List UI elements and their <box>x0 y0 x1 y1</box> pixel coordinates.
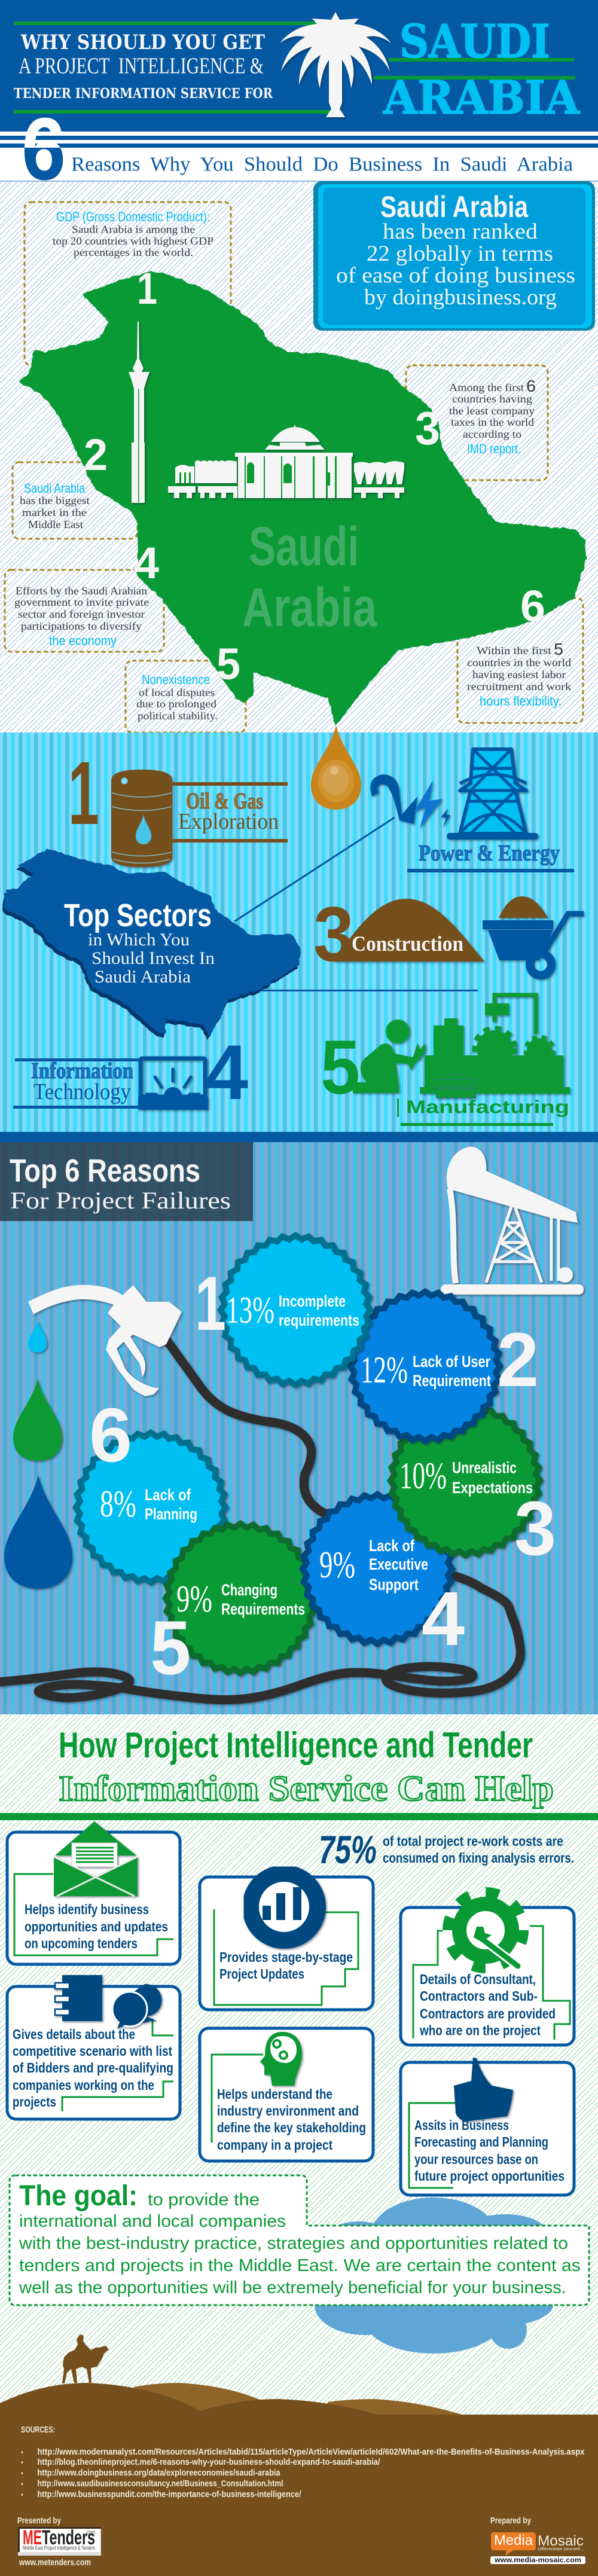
card: forecasting <box>401 2058 574 2195</box>
badge 2: lack of user requirement: Requirement <box>413 1372 491 1390</box>
text: sources: SOURCES: <box>21 2425 55 2435</box>
sector 4: information technology <box>13 1028 248 1116</box>
title: Saudi Arabia: ARABIA <box>383 71 580 125</box>
card: competitive scenario: projects <box>13 2094 56 2110</box>
card: consultant details: Contractors and Sub- <box>420 1988 538 2004</box>
badge 5: changing requirements: Requirements <box>221 1600 305 1618</box>
text: reason 3 taxes: IMD report. <box>467 441 521 456</box>
icon: oil drop <box>311 725 361 810</box>
card: consultant details: Details of Consultant, <box>420 1971 536 1987</box>
badge 4: lack of executive support: 9% <box>319 1543 355 1586</box>
number 4: 4 <box>422 1576 465 1662</box>
text: reason 5 stability <box>136 672 218 722</box>
icon: worker <box>353 1020 426 1093</box>
sector 3: construction: Construction <box>352 932 463 956</box>
text: reason 3 taxes: countries having <box>452 393 532 405</box>
text: reason 1 GDP: percentages in the world. <box>74 246 193 258</box>
panel: project failures <box>0 1142 598 1714</box>
number 2: 2 <box>497 1317 539 1403</box>
text: sources <box>21 2425 585 2499</box>
card: identify business opportunities: Helps identify business <box>25 1902 149 1917</box>
callout: box 5 outline <box>126 661 246 732</box>
logo: presented by ME Tenders: .com <box>86 2529 95 2536</box>
card: consultant details <box>401 1893 574 2045</box>
icon: oil barrel <box>111 770 172 867</box>
text: reason 2 market: Saudi Arabia <box>24 481 86 496</box>
icon: palace <box>168 425 404 498</box>
title: why should you get: TENDER INFORMATION SERVICE FOR <box>14 86 273 102</box>
callout: the goal: with the best-industry practice, strategies and opportunities related to <box>19 2234 568 2253</box>
panel: top sectors <box>0 725 598 1142</box>
logo: presented by ME Tenders: ME <box>23 2526 42 2549</box>
card: identify business opportunities: opportunities and updates <box>25 1919 168 1934</box>
badge 4: lack of executive support: Executive <box>369 1555 428 1573</box>
callout: ease of doing business ranking: Saudi Arabia <box>380 190 529 224</box>
number 6: 6 <box>89 1393 132 1478</box>
text: reason 2 market: Middle East <box>28 518 83 530</box>
badge 6: lack of planning: Lack of <box>145 1486 191 1504</box>
text: reason 4 economy <box>14 585 149 648</box>
map: top sectors: Top Sectors <box>64 898 212 933</box>
text: reason 3 taxes <box>449 377 536 456</box>
logo: presented by ME Tenders: Tenders <box>42 2526 95 2549</box>
sector 5: manufacturing <box>321 995 570 1126</box>
icon: fuel nozzle <box>28 1285 182 1396</box>
number 1: 1 <box>137 264 157 313</box>
text: sources: http://www.doingbusiness.org/data/exploreeconomies/saudi-arabia <box>37 2468 280 2478</box>
badge 5: changing requirements: Changing <box>221 1581 277 1599</box>
icon: cyan drop <box>29 1320 47 1353</box>
icon: green drop <box>13 1379 62 1461</box>
heading <box>59 1725 554 1808</box>
sector 2: power and energy: Power & Energy <box>419 841 560 866</box>
callout: box 4 outline <box>5 570 164 652</box>
map: top sectors <box>2 849 300 1040</box>
sector 3: construction <box>313 890 584 978</box>
text: sources: http://www.saudibusinessconsultancy.net/Business_Consultation.html <box>37 2479 283 2489</box>
text: reason 3 taxes: taxes in the world <box>451 416 534 428</box>
sector 1: oil and gas: 1 <box>68 743 99 843</box>
text: reason 1 GDP: GDP (Gross Domestic Product): <box>56 209 210 224</box>
title: why should you get: A PROJECT INTELLIGENCE & <box>19 54 264 79</box>
card: identify business opportunities: on upcoming tenders <box>25 1936 138 1951</box>
icon: monitor with sun <box>138 1058 208 1110</box>
sector 4: information technology: Information <box>31 1058 133 1083</box>
badge 1: incomplete requirements <box>217 1232 374 1388</box>
logo: presented by ME Tenders: Presented by <box>17 2516 61 2526</box>
text: reason 4 economy: participations to diversify <box>21 620 142 632</box>
callout: ease of doing business ranking <box>313 181 595 331</box>
icon: blue drop <box>4 1475 72 1589</box>
card: forecasting: Assits in Business <box>414 2117 509 2133</box>
heading: 6 reasons: Reasons Why You Should Do Business In Saudi Arabia <box>71 153 573 176</box>
text: reason 6 labor: having easiest labor <box>472 669 566 680</box>
icon: cloud <box>315 2197 553 2354</box>
text: Saudi Arabia watermark: Arabia <box>242 577 377 638</box>
stat: 75 percent <box>319 1827 574 1872</box>
map: Saudi Arabia <box>19 271 586 725</box>
text: reason 1 GDP <box>53 209 213 258</box>
text: reason 6 labor <box>467 640 571 709</box>
icon: sand dunes <box>0 2383 598 2576</box>
callout: ease of doing business ranking: has been ranked <box>383 219 538 244</box>
card: competitive scenario: companies working on the <box>13 2077 154 2093</box>
sector 4: information technology: Technology <box>33 1079 131 1104</box>
badge 2: lack of user requirement: Lack of User <box>413 1353 490 1371</box>
icon: number 2 lightning <box>370 774 450 828</box>
callout: the goal: well as the opportunities will be extremely beneficial for your business. <box>19 2278 566 2297</box>
sector 1: oil and gas: Exploration <box>178 809 279 834</box>
number 3: 3 <box>514 1486 556 1571</box>
map: top sectors: in Which You <box>88 930 190 950</box>
text: reason 5 stability: political stability. <box>138 710 218 722</box>
text: reason 3 taxes: according to <box>463 428 521 440</box>
text: reason 2 market: has the biggest <box>20 495 90 506</box>
badge 4: lack of executive support <box>299 1491 456 1647</box>
callout: the goal: tenders and projects in the Middle East. We are certain the content as <box>19 2256 581 2275</box>
card: stage updates: Provides stage-by-stage <box>219 1949 353 1965</box>
badge 3: unrealistic expectations: Expectations <box>452 1479 533 1497</box>
number 1: 1 <box>195 1261 226 1347</box>
map: top sectors: Should Invest In <box>91 948 215 968</box>
text: reason 4 economy: government to invite private <box>14 596 149 608</box>
panel: desert footer <box>0 2334 598 2576</box>
text: reason 4 economy: the economy <box>49 633 117 648</box>
card: stage updates: Project Updates <box>219 1966 304 1982</box>
card: understand environment: industry environment and <box>217 2103 359 2119</box>
icon: oil pump <box>441 1147 584 1295</box>
text: reason 2 market <box>20 481 90 530</box>
logo: prepared by Media Mosaic: Media <box>494 2532 533 2548</box>
number 3: 3 <box>415 402 440 454</box>
icon: monument tower <box>129 322 150 503</box>
logo: prepared by Media Mosaic <box>490 2516 585 2564</box>
stat: 75 percent: of total project re-work costs are <box>383 1833 563 1849</box>
text: Saudi Arabia watermark: Saudi <box>249 516 359 577</box>
sector 5: manufacturing: 5 <box>321 1025 360 1110</box>
text: sources: http://blog.theonlineproject.me/6-reasons-why-your-business-should-expand-to-saudi-arabia/ <box>37 2457 380 2467</box>
text: reason 6 labor: countries in the world <box>467 657 571 669</box>
heading: 6 reasons: 6 <box>22 100 66 199</box>
sector 2: power and energy <box>370 749 574 872</box>
callout: the goal <box>10 2175 589 2305</box>
card: understand environment: company in a project <box>217 2137 332 2153</box>
text: reason 3 taxes: Among the first <box>449 381 524 393</box>
text: Saudi Arabia watermark <box>242 516 377 638</box>
card: consultant details: who are on the project <box>419 2022 541 2038</box>
panel: how project intelligence can help <box>0 1714 598 2420</box>
stat: 75 percent: 75% <box>319 1827 377 1872</box>
icon: thumbs up <box>454 2058 513 2122</box>
text: reason 4 economy: Efforts by the Saudi Arabian <box>16 585 147 597</box>
icon: speech bubbles <box>112 1984 161 2029</box>
badge 6: lack of planning <box>72 1429 229 1586</box>
sector 1: oil and gas: Oil & Gas <box>186 789 263 814</box>
sector 1: oil and gas <box>68 743 288 867</box>
text: reason 1 GDP: top 20 countries with highest GDP <box>53 235 213 247</box>
card: competitive scenario <box>7 1975 180 2119</box>
icon: wheelbarrow <box>483 896 584 975</box>
panel: map section <box>0 181 598 732</box>
badge 5: changing requirements: 9% <box>176 1577 212 1620</box>
card: identify business opportunities <box>7 1821 180 1964</box>
logo: presented by ME Tenders: Middle East Project Intelligence & Tenders <box>23 2545 95 2551</box>
callout: box 1 outline <box>25 202 231 365</box>
callout: ease of doing business ranking: by doingbusiness.org <box>364 285 557 310</box>
text: reason 4 economy: sector and foreign investor <box>18 608 145 620</box>
icon: sand mound <box>334 899 484 962</box>
sector 3: construction: 3 <box>313 890 354 978</box>
badge 1: incomplete requirements: 13% <box>226 1289 274 1331</box>
card: competitive scenario: of Bidders and pre-qualifying <box>13 2060 173 2076</box>
card: understand environment: define the key stakeholding <box>217 2120 366 2135</box>
icon: camel rider <box>62 2334 109 2383</box>
text: reason 5 stability: due to prolonged <box>136 698 216 710</box>
card: forecasting: Forecasting and Planning <box>414 2134 548 2150</box>
badge 1: incomplete requirements: requirements <box>279 1311 359 1329</box>
logo: presented by ME Tenders: www.metenders.com <box>19 2557 91 2568</box>
title: why should you get <box>14 30 273 102</box>
text: reason 1 GDP: Saudi Arabia is among the <box>72 224 195 236</box>
text: reason 5 stability: Nonexistence <box>142 672 210 687</box>
callout: the goal: The goal: <box>19 2180 138 2212</box>
heading: top 6 reasons <box>0 1142 253 1221</box>
badge 2: lack of user requirement: 12% <box>361 1348 408 1391</box>
text: reason 2 market: market in the <box>22 506 87 518</box>
badge 4: lack of executive support: Lack of <box>369 1537 415 1555</box>
heading: top 6 reasons: Top 6 Reasons <box>10 1153 200 1189</box>
heading: 6 reasons: 6 <box>22 100 66 199</box>
badge 6: lack of planning: 8% <box>100 1482 136 1525</box>
icon: envelope <box>54 1821 138 1896</box>
callout: box 2 outline <box>13 462 138 539</box>
map: top sectors: Saudi Arabia <box>94 967 191 987</box>
text: reason 3 taxes: 6 <box>526 377 536 395</box>
text: reason 5 stability: of local disputes <box>139 686 215 698</box>
logo: presented by ME Tenders <box>17 2516 101 2568</box>
card: competitive scenario: competitive scenario with list <box>13 2043 172 2059</box>
card: forecasting: future project opportunities <box>414 2168 565 2184</box>
text: sources: http://www.businesspundit.com/the-importance-of-business-intelligence/ <box>37 2489 301 2499</box>
icon: fuel hose <box>0 1341 520 1699</box>
card: understand environment <box>200 2028 373 2161</box>
heading: 6 reasons <box>22 100 573 199</box>
badge 2: lack of user requirement <box>347 1288 504 1445</box>
panel: header <box>0 0 598 132</box>
card: consultant details: Contractors are provided <box>420 2006 556 2021</box>
logo: prepared by Media Mosaic: Differentiate yourself... <box>538 2547 584 2551</box>
number 5: 5 <box>216 639 240 689</box>
callout: the goal: international and local companies <box>19 2212 286 2231</box>
text: reason 3 taxes: the least company <box>449 405 535 417</box>
icon: palm tree <box>280 12 391 117</box>
callout: ease of doing business ranking: of ease of doing business <box>336 263 575 288</box>
badge 6: lack of planning: Planning <box>145 1505 197 1523</box>
number 4: 4 <box>134 538 159 588</box>
badge 3: unrealistic expectations <box>387 1402 544 1559</box>
heading: top 6 reasons: For Project Failures <box>10 1187 231 1214</box>
card: stage updates <box>200 1873 373 2010</box>
callout: ease of doing business ranking: 22 globally in terms <box>367 242 553 266</box>
icon: transmission tower <box>447 749 538 840</box>
text: reason 6 labor: Within the first <box>477 645 551 657</box>
number 6: 6 <box>520 581 545 631</box>
title: why should you get: WHY SHOULD YOU GET <box>20 30 265 54</box>
callout: the goal: to provide the <box>148 2190 260 2209</box>
logo: prepared by Media Mosaic: Mosaic <box>538 2533 584 2549</box>
text: reason 6 labor: recruitment and work <box>467 680 571 692</box>
badge 4: lack of executive support: Support <box>369 1576 419 1594</box>
icon: connector lines <box>234 817 478 990</box>
sector 4: information technology: 4 <box>205 1028 248 1116</box>
icon: factory <box>420 995 570 1098</box>
icon: chart in ring <box>251 1873 318 1940</box>
panel: stripes under header <box>0 132 598 182</box>
heading: Information Service Can Help <box>59 1769 554 1808</box>
card: forecasting: your resources base on <box>414 2151 538 2167</box>
callout: box 3 outline <box>406 365 548 480</box>
badge 5: changing requirements <box>162 1520 319 1677</box>
badge 1: incomplete requirements: Incomplete <box>279 1292 346 1310</box>
number 5: 5 <box>150 1606 191 1691</box>
number 2: 2 <box>84 430 108 480</box>
badge 3: unrealistic expectations: Unrealistic <box>452 1459 517 1477</box>
icon: gear and wrench <box>448 1893 523 1968</box>
icon: head with gears <box>260 2032 302 2086</box>
title: Saudi Arabia <box>383 15 580 125</box>
icon: notebook <box>55 1975 102 2021</box>
sector 5: manufacturing: Manufacturing <box>406 1097 569 1117</box>
callout: box 6 outline <box>457 598 583 723</box>
card: understand environment: Helps understand the <box>217 2086 332 2102</box>
card: competitive scenario: Gives details about the <box>13 2026 135 2042</box>
text: reason 6 labor: 5 <box>554 640 563 658</box>
logo: prepared by Media Mosaic: www.media-mosaic.com <box>494 2556 581 2564</box>
badge 3: unrealistic expectations: 10% <box>399 1454 447 1497</box>
logo: prepared by Media Mosaic: Prepared by <box>490 2516 532 2526</box>
text: reason 6 labor: hours flexibility. <box>480 694 562 709</box>
title: Saudi Arabia: SAUDI <box>399 15 550 69</box>
